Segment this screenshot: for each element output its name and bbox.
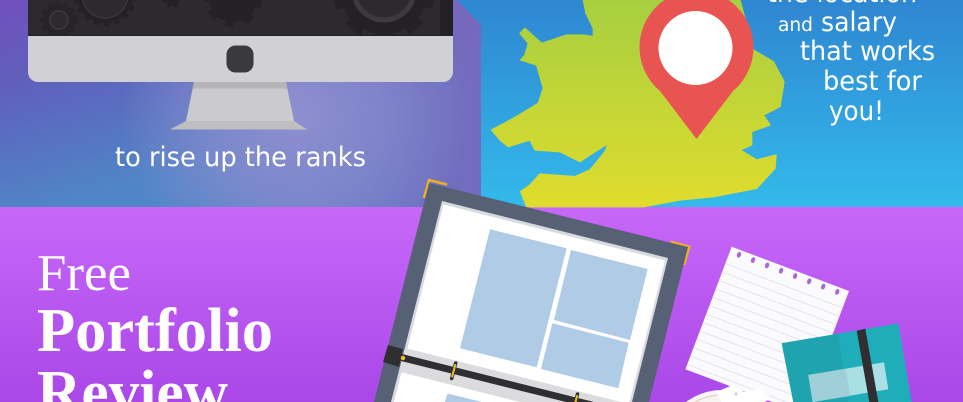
- text: the location and salary that works best for you: that works: [800, 36, 935, 67]
- text: the location and salary that works best for you: best for: [823, 66, 923, 97]
- monitor screen with gears: [28, 0, 453, 36]
- text: the location and salary that works best for you: salary: [821, 7, 897, 38]
- icon: desktop monitor: [28, 0, 453, 130]
- heading: Free Portfolio Review: Portfolio: [37, 297, 273, 365]
- monitor bezel: [28, 36, 453, 82]
- icon: teal notebook: [782, 323, 912, 402]
- binder yellow corners: [424, 180, 689, 265]
- heading: Free Portfolio Review: [37, 245, 273, 402]
- panel: portfolio review background: [0, 207, 963, 402]
- binder cover: [374, 183, 688, 402]
- notebook strap: [857, 329, 878, 402]
- text: the location and salary that works best for you: and: [778, 15, 813, 36]
- icon: white plate: [662, 385, 782, 402]
- monitor stand: [170, 82, 307, 130]
- binder rings: [452, 363, 578, 402]
- text: the location and salary that works best for you: [767, 0, 935, 127]
- monitor button: [226, 46, 254, 72]
- icon: spiral notepad: [685, 247, 849, 402]
- photo panel bottom right: [541, 323, 629, 388]
- icon: location pin: [640, 0, 754, 139]
- notebook label: [808, 362, 888, 402]
- heading: Free Portfolio Review: Free: [37, 245, 131, 302]
- photo panel lower page: [445, 394, 482, 402]
- binder spine strip: [383, 345, 594, 402]
- map of southern Britain: [492, 0, 784, 207]
- binder spine band: [400, 348, 621, 402]
- text: to rise up the ranks: to rise up the ranks: [115, 142, 366, 173]
- text: the location and salary that works best for you: you!: [829, 96, 884, 127]
- panel: promotion background: [0, 0, 482, 207]
- photo panel large: [460, 229, 567, 367]
- panel: location background: [457, 0, 963, 207]
- photo panel top right: [554, 250, 648, 340]
- icon: open portfolio binder: [374, 180, 689, 402]
- binder pages: [391, 201, 668, 402]
